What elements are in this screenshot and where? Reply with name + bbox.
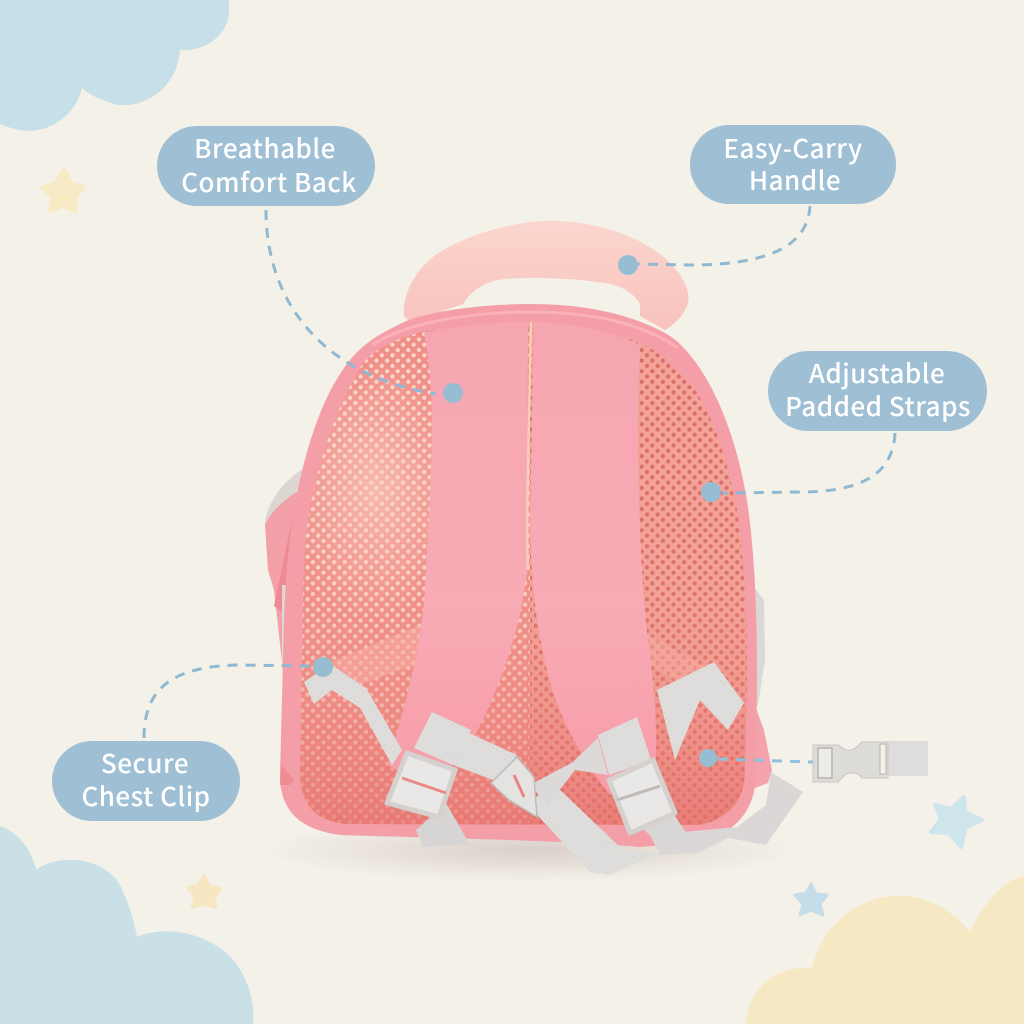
- callout: Adjustable Padded Straps: [701, 351, 987, 502]
- backpack: [260, 221, 803, 882]
- webbing: left tail: [416, 803, 494, 847]
- star: right: [931, 797, 982, 847]
- ground shadow: [260, 818, 800, 882]
- right tab: [751, 700, 772, 788]
- mesh back: [290, 320, 760, 840]
- webbing: clip strap: [453, 733, 517, 783]
- padded strap: left: [388, 322, 528, 790]
- chest clip: [491, 757, 537, 817]
- star: top left: [42, 170, 84, 211]
- star: bottom left: [188, 876, 221, 907]
- loose buckle accessory: [813, 741, 928, 782]
- body: [280, 304, 757, 847]
- callout: Adjustable Padded Straps: Adjustable: [809, 354, 945, 391]
- callout: Easy-Carry Handle: [618, 125, 896, 275]
- webbing: left wing: [304, 664, 402, 765]
- callout: Secure Chest Clip: Chest Clip: [81, 777, 211, 814]
- callout: Easy-Carry Handle: Easy-Carry: [723, 129, 863, 166]
- slider buckle: right: [609, 760, 675, 833]
- callout: Breathable Comfort Back: Comfort Back: [181, 163, 357, 200]
- callout: Secure Chest Clip: [52, 657, 333, 821]
- cloud: bottom left: [0, 826, 253, 1024]
- buckle pointer: [699, 749, 813, 767]
- rim seam: [372, 312, 678, 348]
- callout: Secure Chest Clip: Secure: [101, 744, 189, 781]
- webbing: right slider strap: [598, 717, 651, 775]
- webbing: left slider strap: [414, 712, 471, 765]
- strap centre stitching: [527, 322, 531, 570]
- callout: Adjustable Padded Straps: Padded Straps: [785, 387, 971, 424]
- side pocket: left: [265, 468, 304, 680]
- star: lower right: [795, 884, 827, 915]
- callout: Breathable Comfort Back: [157, 126, 463, 403]
- webbing: upper crossing: [530, 738, 608, 805]
- slider buckle: left: [387, 753, 455, 817]
- side pocket: right: [750, 585, 765, 720]
- callout: Easy-Carry Handle: Handle: [749, 161, 841, 198]
- webbing: lower right loop: [650, 772, 803, 855]
- webbing: right wing: [657, 662, 744, 760]
- callout: Breathable Comfort Back: Breathable: [194, 129, 336, 166]
- padded strap: right: [530, 322, 656, 795]
- lower trim: [280, 765, 294, 785]
- webbing: right tail: [644, 813, 691, 852]
- webbing: lower crossing strap: [528, 782, 659, 875]
- cloud: top left: [0, 0, 229, 131]
- cloud: bottom right: [746, 876, 1024, 1024]
- handle: [404, 221, 688, 330]
